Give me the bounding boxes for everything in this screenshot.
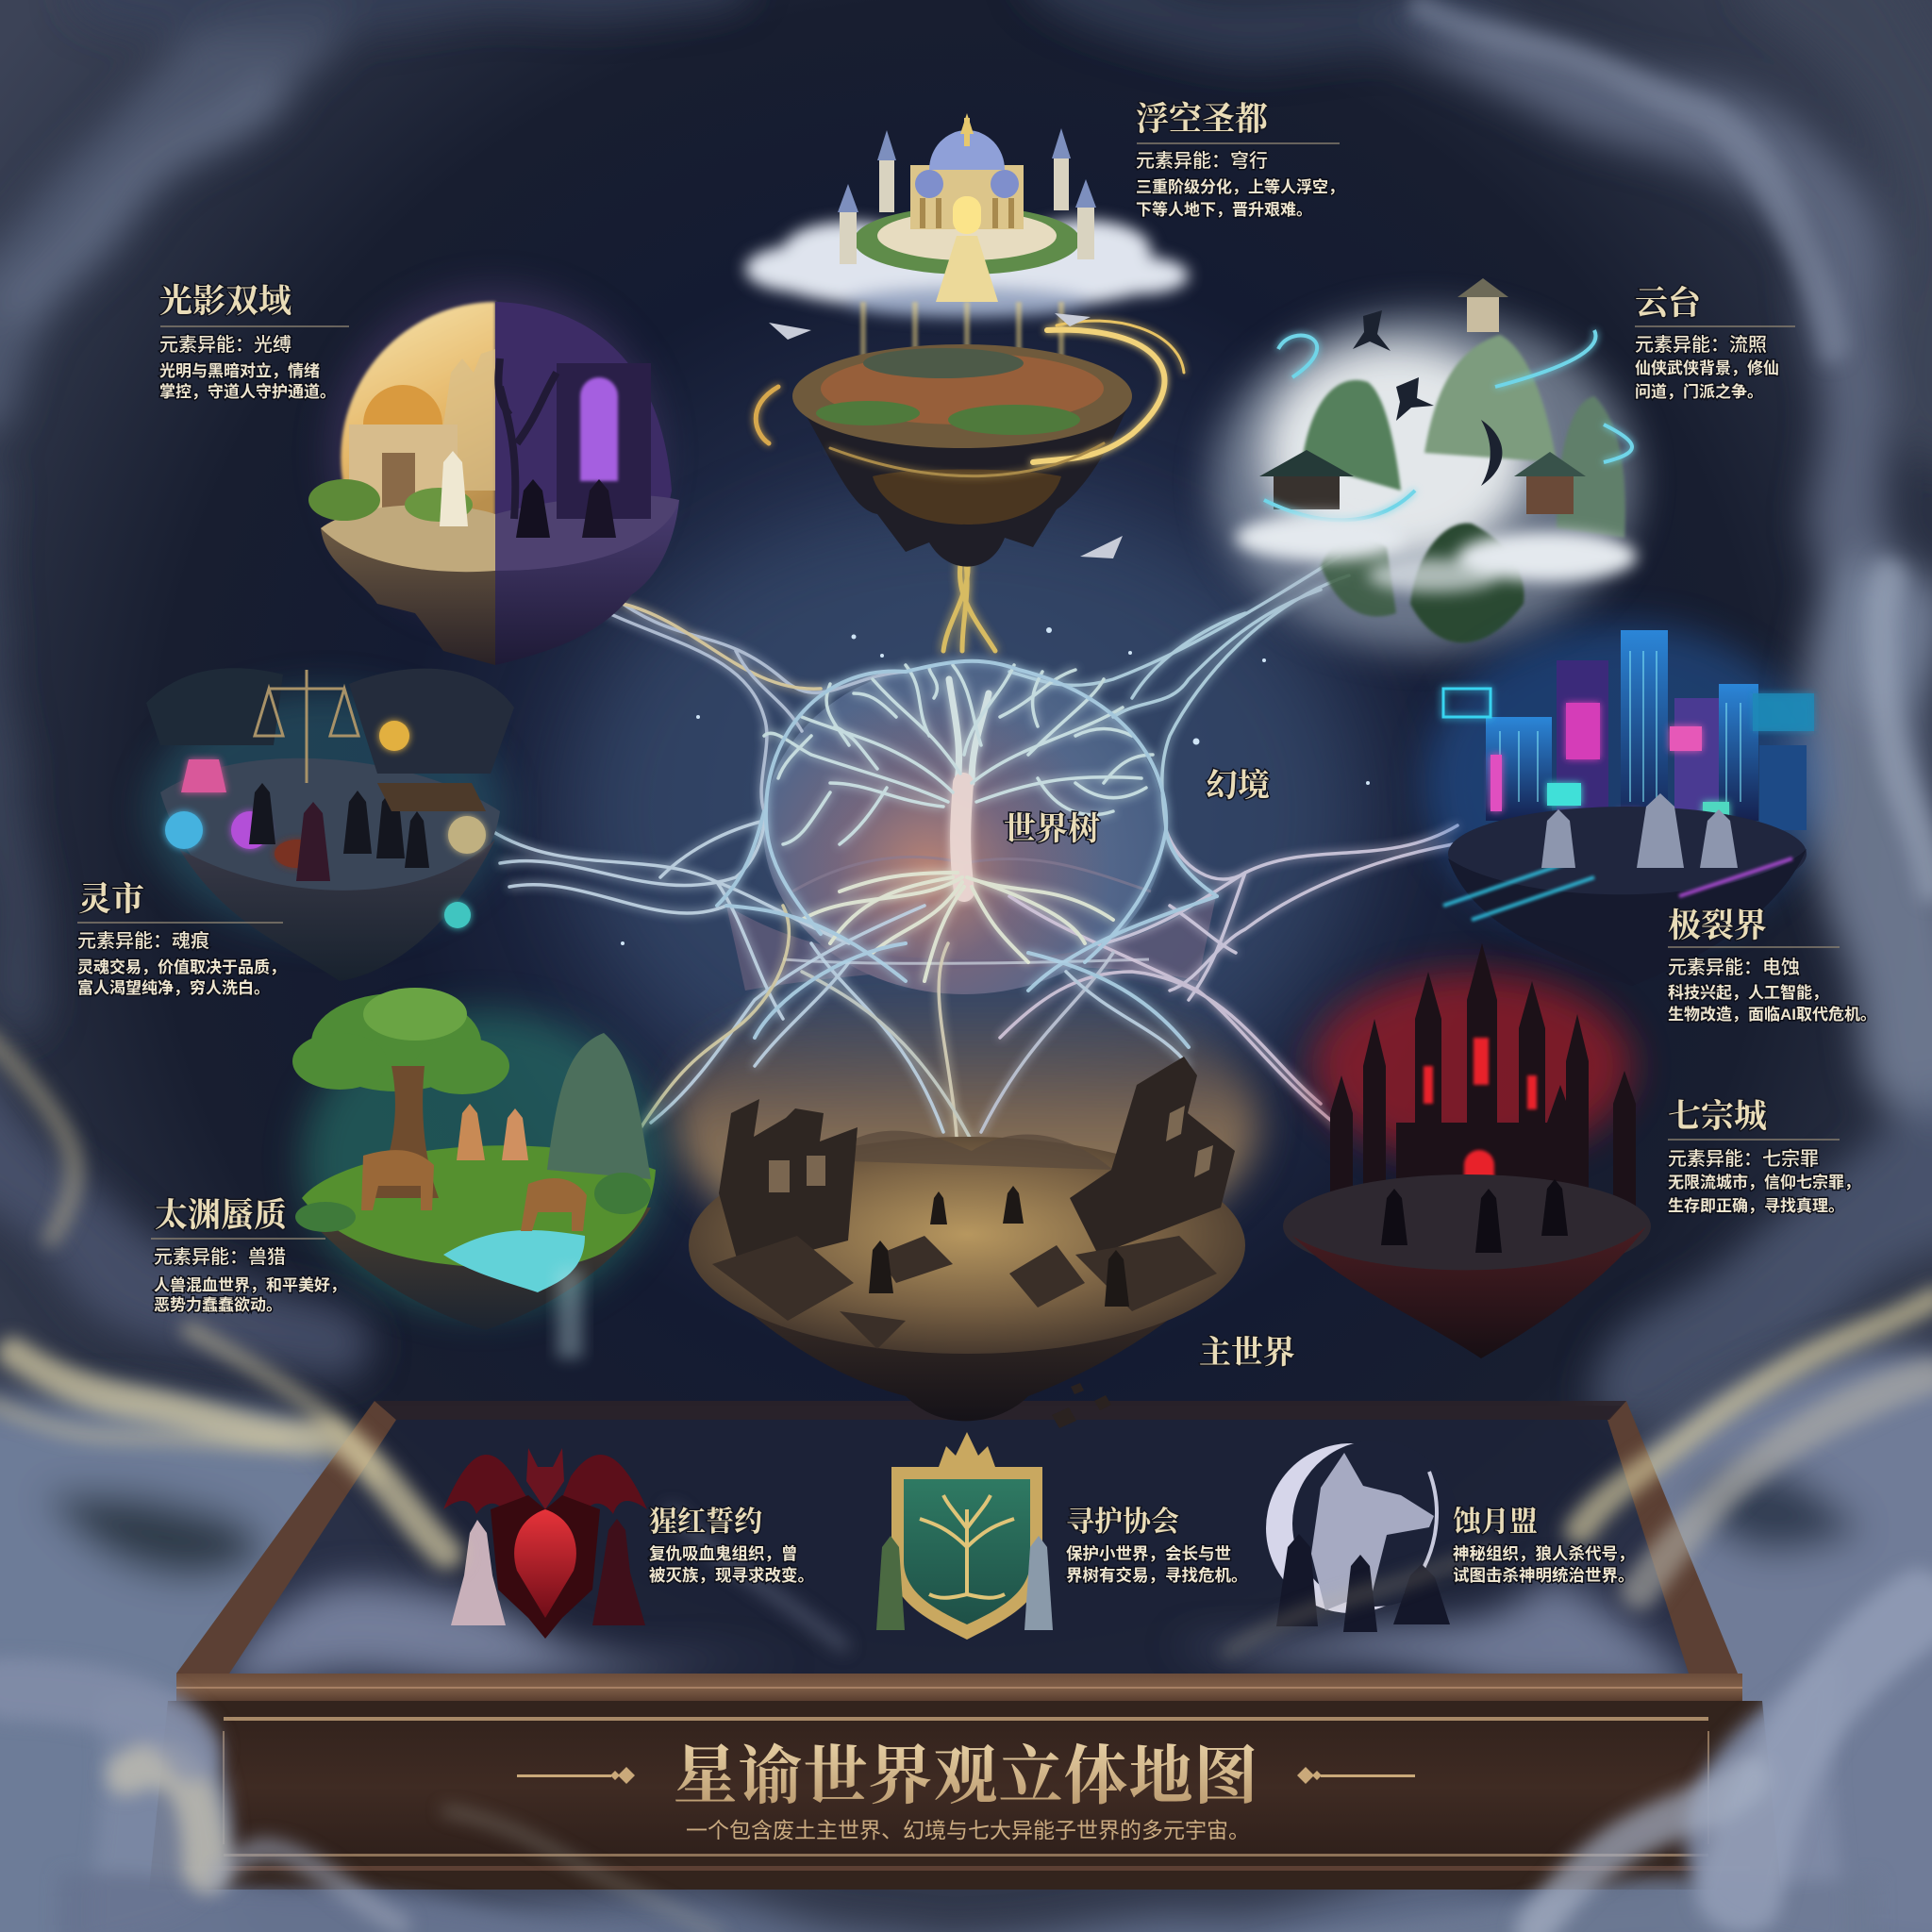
right ruined building xyxy=(1070,1057,1235,1255)
faction: 蚀月盟: 神秘组织，狼人杀代号， xyxy=(1453,1544,1634,1563)
label: 极裂界: 元素异能：电蚀 xyxy=(1668,957,1800,978)
mechs xyxy=(1541,793,1738,868)
label: 七宗城: 七宗城 xyxy=(1668,1098,1767,1135)
root lines toward the upper right domain xyxy=(1009,557,1349,830)
towers xyxy=(840,158,1094,264)
root lines toward the left market xyxy=(491,811,849,1019)
clouds around the palace xyxy=(745,220,1189,317)
outer glow xyxy=(330,288,660,618)
bat wings xyxy=(443,1455,647,1514)
label: 太渊蜃质 xyxy=(151,1197,346,1314)
light ground xyxy=(321,505,495,572)
interior smoke xyxy=(226,1566,1689,1674)
sand surface xyxy=(689,1137,1245,1354)
island: jungle of beasts 太渊蜃质 xyxy=(292,988,660,1358)
label: 浮空圣都: 元素异能：穹行 xyxy=(1136,150,1268,172)
balance scales xyxy=(255,670,358,783)
label: 七宗城: 无限流城市，信仰七宗罪， xyxy=(1668,1173,1860,1191)
faction: 蚀月盟 xyxy=(1453,1507,1634,1585)
potion bottles xyxy=(165,721,486,928)
label: 灵市 xyxy=(77,881,286,997)
faction: 猩红誓约: 被灭族，现寻求改变。 xyxy=(649,1566,814,1585)
label: 光影双域: 掌控，守道人守护通道。 xyxy=(159,382,336,401)
water stream xyxy=(443,1230,585,1292)
trading counter xyxy=(377,783,486,811)
distant light city xyxy=(443,349,495,491)
palace hall xyxy=(910,165,1024,229)
moon disc xyxy=(1266,1443,1436,1613)
label: 光影双域: 光影双域 xyxy=(159,283,291,320)
mountains xyxy=(547,1033,651,1179)
faction: 蚀月盟: 试图击杀神明统治世界。 xyxy=(1453,1566,1634,1585)
golden stairs xyxy=(936,236,998,302)
airships xyxy=(769,313,1123,558)
bottom tray frame xyxy=(149,1401,1781,1890)
plaque board xyxy=(224,1718,1708,1857)
light pillars xyxy=(863,302,1061,396)
bushes xyxy=(295,1173,651,1232)
faction: 蚀月盟: 蚀月盟 xyxy=(1453,1507,1538,1538)
label: 极裂界: 极裂界 xyxy=(1668,908,1767,944)
floating rock underside xyxy=(794,396,1132,567)
label: 幻境: 幻境 xyxy=(1206,768,1270,804)
gothic towers xyxy=(1330,943,1636,1217)
right guardian xyxy=(1024,1536,1053,1630)
light temple xyxy=(349,425,458,514)
label: 太渊蜃质: 太渊蜃质 xyxy=(155,1197,287,1234)
emblem: guardian association xyxy=(876,1432,1053,1640)
teal-green glow xyxy=(302,1009,660,1311)
label: 云台: 云台 xyxy=(1635,285,1702,322)
platform xyxy=(1283,1174,1651,1278)
tree roots xyxy=(802,873,1113,981)
label: 七宗城: 生存即正确，寻找真理。 xyxy=(1668,1196,1844,1215)
island top: town xyxy=(792,344,1132,448)
low clouds xyxy=(1236,515,1637,592)
faction: 猩红誓约 xyxy=(649,1507,814,1585)
dark ground xyxy=(495,495,679,571)
root lines toward the right city xyxy=(1104,825,1457,1000)
rock underside xyxy=(307,1208,651,1330)
rubble xyxy=(712,1236,1217,1349)
faction: 寻护协会: 界树有交易，寻找危机。 xyxy=(1066,1566,1247,1585)
shield field xyxy=(904,1479,1030,1624)
island: spirit market 灵市 xyxy=(146,668,514,981)
label: 光影双域: 光明与黑暗对立，情绪 xyxy=(159,361,320,380)
light half sky xyxy=(341,302,495,547)
label: 光影双域: 元素异能：光缚 xyxy=(159,334,291,356)
smoke: outer ring of clouds xyxy=(0,0,1932,1368)
front rim xyxy=(176,1674,1742,1701)
mountains xyxy=(1302,335,1625,642)
grass top xyxy=(302,1145,656,1269)
label: 七宗城: 元素异能：七宗罪 xyxy=(1668,1147,1819,1170)
tray left rim xyxy=(176,1401,396,1674)
crest body xyxy=(491,1495,600,1639)
underside xyxy=(1292,1226,1646,1358)
label: 极裂界: 生物改造，面临AI取代危机。 xyxy=(1668,1005,1876,1024)
label: 浮空圣都 xyxy=(1136,101,1344,219)
palace xyxy=(838,113,1096,302)
platform xyxy=(1448,807,1807,901)
subtitle: 一个包含废土主世界、幻境与七大异能子世界的多元宇宙。 xyxy=(686,1818,1250,1842)
neon streaks xyxy=(1443,858,1792,920)
label: 光影双域 xyxy=(159,283,349,401)
wolf head xyxy=(1311,1453,1434,1610)
label: 极裂界: 科技兴起，人工智能， xyxy=(1668,983,1828,1002)
label: 云台: 问道，门派之争。 xyxy=(1635,382,1763,401)
dead tree xyxy=(498,358,557,519)
root lines toward the upper left domain xyxy=(590,590,906,811)
horizon xyxy=(792,857,1151,891)
shield crown xyxy=(939,1432,995,1467)
label: 太渊蜃质: 元素异能：兽猎 xyxy=(154,1246,286,1268)
tree trunk xyxy=(949,679,989,783)
faction: 猩红誓约: 猩红誓约 xyxy=(649,1507,762,1538)
label: 灵市: 灵市 xyxy=(78,881,144,918)
title ornaments xyxy=(517,1767,1415,1784)
cloud glow xyxy=(1212,311,1637,651)
faction: 寻护协会: 寻护协会 xyxy=(1066,1507,1179,1538)
rocky underside xyxy=(693,1245,1243,1421)
label: 云台: 元素异能：流照 xyxy=(1635,334,1767,356)
pale vampire xyxy=(451,1520,506,1625)
sphere web outer ring xyxy=(717,661,1217,1047)
root lines toward lower domains xyxy=(632,896,1340,1179)
island: light and shadow domain 光影双域 xyxy=(308,288,679,665)
flying swordsmen xyxy=(1353,310,1502,486)
bottom corner cloud banks xyxy=(0,1374,1932,1932)
golden orbit streaks xyxy=(756,321,1184,476)
emblem: crimson oath xyxy=(443,1448,647,1639)
shadow half sky xyxy=(495,302,672,547)
label: 主世界: 主世界 xyxy=(1199,1335,1295,1371)
green terrace xyxy=(854,207,1080,275)
label: 灵市: 元素异能：魂痕 xyxy=(77,930,209,952)
red windows xyxy=(1424,1038,1537,1198)
tower window stripes xyxy=(1500,651,1740,802)
blue neon glow xyxy=(1424,623,1821,943)
label: 灵市: 富人渴望纯净，穷人洗白。 xyxy=(77,978,270,997)
label: 七宗城 xyxy=(1668,1098,1860,1215)
figures xyxy=(440,451,616,538)
tray right rim xyxy=(1607,1401,1738,1674)
island: cyber rift city 极裂界 xyxy=(1424,623,1821,986)
left guardian xyxy=(876,1536,905,1630)
network of glowing roots xyxy=(491,528,1457,1179)
demon head xyxy=(526,1448,564,1509)
rock underside xyxy=(321,528,495,665)
far mountains xyxy=(821,1131,1113,1170)
gold tree xyxy=(920,1495,1014,1598)
plaque top trim xyxy=(224,1717,1708,1721)
tree trunk xyxy=(373,1066,439,1198)
tray interior xyxy=(176,1406,1734,1674)
thin moon arc xyxy=(1406,1472,1437,1594)
silhouettes xyxy=(1276,1534,1450,1632)
beasts and hunters xyxy=(361,1104,587,1231)
traders xyxy=(249,783,429,881)
island: sky capital 浮空圣都 xyxy=(745,113,1189,567)
shield rim xyxy=(891,1467,1042,1640)
red glow xyxy=(1311,972,1632,1160)
plaque side trim xyxy=(224,1731,1708,1844)
sphere body xyxy=(763,662,1165,994)
market floor xyxy=(160,758,500,929)
dark vampire xyxy=(592,1519,645,1625)
moon shadow xyxy=(1292,1441,1458,1607)
label: 云台: 仙侠武侠背景，修仙 xyxy=(1635,359,1779,377)
golden root to sky city xyxy=(943,528,995,651)
tray top rim xyxy=(375,1401,1626,1420)
neon signs xyxy=(1443,689,1814,851)
title: 星谕世界观立体地图 xyxy=(673,1740,1259,1812)
plaque bottom trim xyxy=(224,1854,1708,1857)
island: main wasteland world 主世界 xyxy=(689,1057,1245,1428)
emblem: eclipse moon alliance xyxy=(1266,1441,1458,1632)
dark figures xyxy=(1381,1179,1568,1253)
label: 太渊蜃质: 人兽混血世界，和平美好， xyxy=(154,1275,346,1294)
pagodas xyxy=(1259,278,1586,514)
towers xyxy=(1486,630,1807,840)
island: cloud terrace 云台 xyxy=(1212,278,1637,651)
left ruined building xyxy=(719,1099,858,1269)
left awning xyxy=(146,668,283,745)
world tree sphere xyxy=(726,662,1217,994)
label: 云台 xyxy=(1635,285,1795,401)
floating stones xyxy=(1052,1383,1111,1428)
faction: 寻护协会 xyxy=(1066,1507,1247,1585)
label: 浮空圣都: 浮空圣都 xyxy=(1136,101,1268,138)
label: 世界树: 世界树 xyxy=(1004,811,1100,847)
label: 浮空圣都: 三重阶级分化，上等人浮空， xyxy=(1136,177,1344,196)
label: 极裂界 xyxy=(1668,908,1876,1024)
right awning xyxy=(349,669,514,774)
lower webbed membrane xyxy=(726,891,1217,991)
rock under xyxy=(179,840,495,981)
front smoke covering plaque edges xyxy=(57,1660,1877,1932)
tree canopy xyxy=(292,988,509,1094)
shadow gate xyxy=(557,363,651,519)
label: 灵市: 灵魂交易，价值取决于品质， xyxy=(77,958,286,976)
plaque base xyxy=(149,1701,1781,1890)
teal glow xyxy=(146,689,505,934)
survivors xyxy=(869,1186,1129,1307)
glow behind the world tree xyxy=(568,500,1360,1123)
haze of the main world sky xyxy=(675,981,1259,1264)
faction: 寻护协会: 保护小世界，会长与世 xyxy=(1066,1544,1231,1563)
tree canopy xyxy=(764,665,1153,844)
stars xyxy=(621,627,1370,945)
faction: 猩红誓约: 复仇吸血鬼组织，曾 xyxy=(649,1544,798,1563)
label: 浮空圣都: 下等人地下，晋升艰难。 xyxy=(1136,200,1312,219)
cyan wind rings xyxy=(1264,330,1632,520)
light garden xyxy=(308,479,380,521)
island: seven sins city 七宗城 xyxy=(1283,943,1651,1358)
label: 太渊蜃质: 恶势力蠢蠢欲动。 xyxy=(154,1295,282,1314)
